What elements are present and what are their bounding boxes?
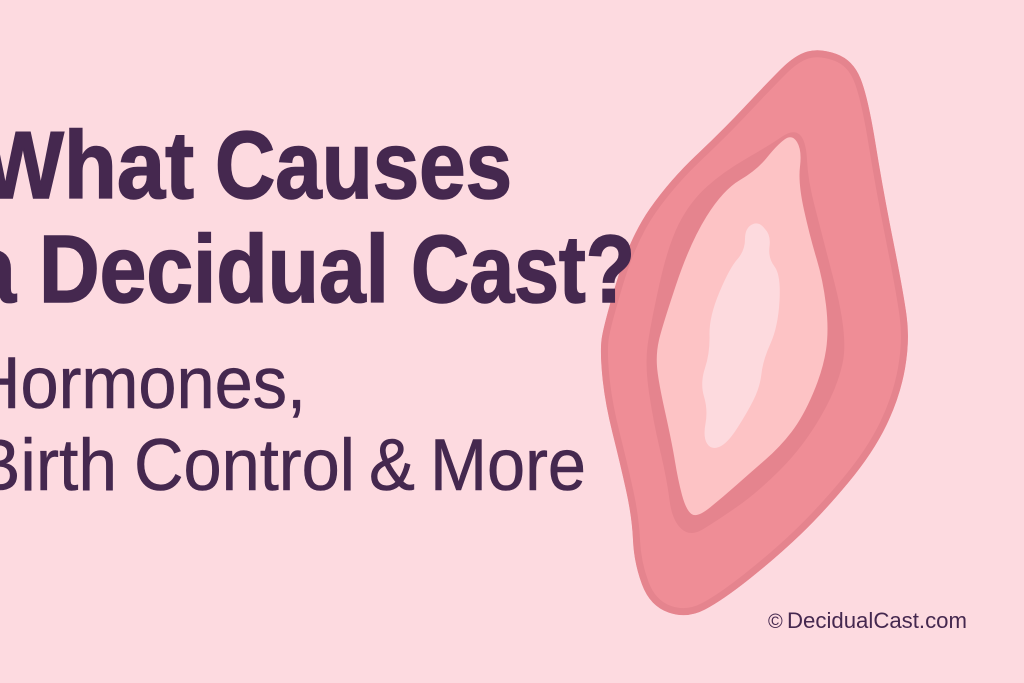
- title: [0, 112, 635, 323]
- subtitle: Control: [134, 425, 355, 506]
- copyright footer: DecidualCast.com: [787, 608, 967, 633]
- darker inner ring: [647, 132, 844, 533]
- inner tissue layer: [657, 137, 828, 515]
- copyright footer: ©: [768, 611, 783, 633]
- outer tissue layer: [601, 50, 908, 615]
- infographic canvas: [0, 50, 966, 628]
- illustration: decidual cast tissue: [601, 50, 908, 615]
- subtitle: [0, 343, 586, 506]
- subtitle: More: [430, 425, 586, 506]
- title: Causes: [215, 112, 512, 219]
- title: Decidual: [39, 216, 389, 323]
- title: Cast?: [411, 216, 635, 323]
- subtitle: &: [369, 425, 415, 506]
- pale central core: [702, 223, 780, 448]
